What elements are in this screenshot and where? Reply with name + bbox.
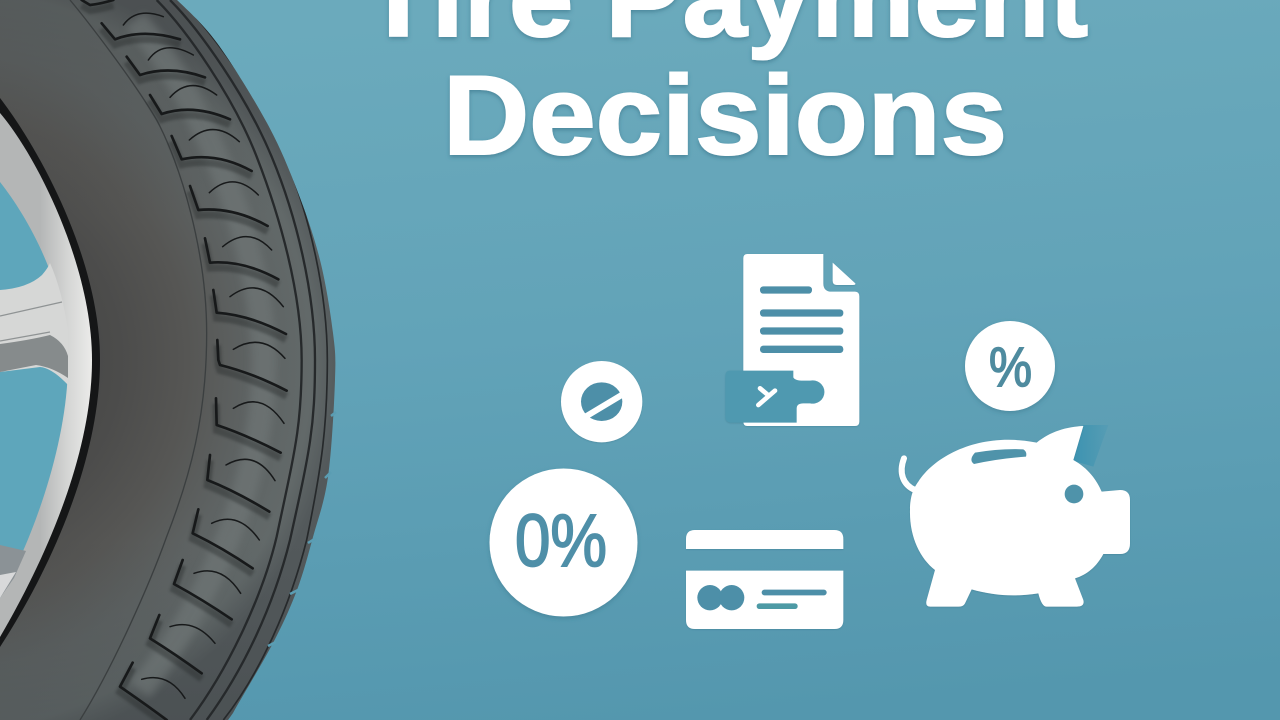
tire with alloy wheel <box>0 0 345 720</box>
card chip circles <box>697 585 723 610</box>
pig body <box>910 426 1130 607</box>
badge circle <box>965 321 1055 411</box>
icon: no-symbol badge <box>561 361 642 442</box>
tread small sipes <box>123 13 285 698</box>
tread block lines <box>82 0 287 720</box>
icon: zero percent badge <box>490 468 638 616</box>
icon: piggy bank <box>902 425 1130 607</box>
badge circle <box>490 468 638 616</box>
card body <box>686 571 843 629</box>
wheel opening <box>0 182 68 598</box>
icon: contract document with puzzle piece <box>725 254 859 426</box>
pig eye <box>1065 485 1083 503</box>
sidewall line <box>70 0 207 720</box>
tire body <box>0 0 345 720</box>
shoulder knob cuts <box>268 412 336 646</box>
zero percent text: 0% <box>515 499 607 582</box>
title <box>363 0 1088 178</box>
title line 2: Decisions <box>443 53 1007 178</box>
puzzle piece <box>725 371 824 423</box>
shoulder notches <box>283 477 336 707</box>
puzzle glyph <box>758 388 775 405</box>
blob <box>581 382 622 421</box>
spoke lower <box>0 545 26 598</box>
document text lines <box>760 286 843 353</box>
rim shadow ring <box>0 98 100 647</box>
percent symbol: % <box>989 335 1032 398</box>
spoke upper <box>0 263 68 385</box>
alloy rim <box>0 113 92 637</box>
icon: credit card <box>686 530 843 629</box>
document fold <box>833 263 855 285</box>
ear shadow <box>1073 425 1108 467</box>
badge circle <box>561 361 642 442</box>
card top strip <box>686 530 843 549</box>
tread highlight band <box>135 20 264 690</box>
document page <box>743 254 859 426</box>
tread block shadows <box>82 5 287 720</box>
coin slot <box>971 449 1026 464</box>
pig tail <box>902 458 915 490</box>
icon: percent badge <box>965 321 1055 411</box>
slash <box>583 394 623 418</box>
card lines <box>762 590 827 595</box>
circumferential grooves <box>157 0 327 720</box>
